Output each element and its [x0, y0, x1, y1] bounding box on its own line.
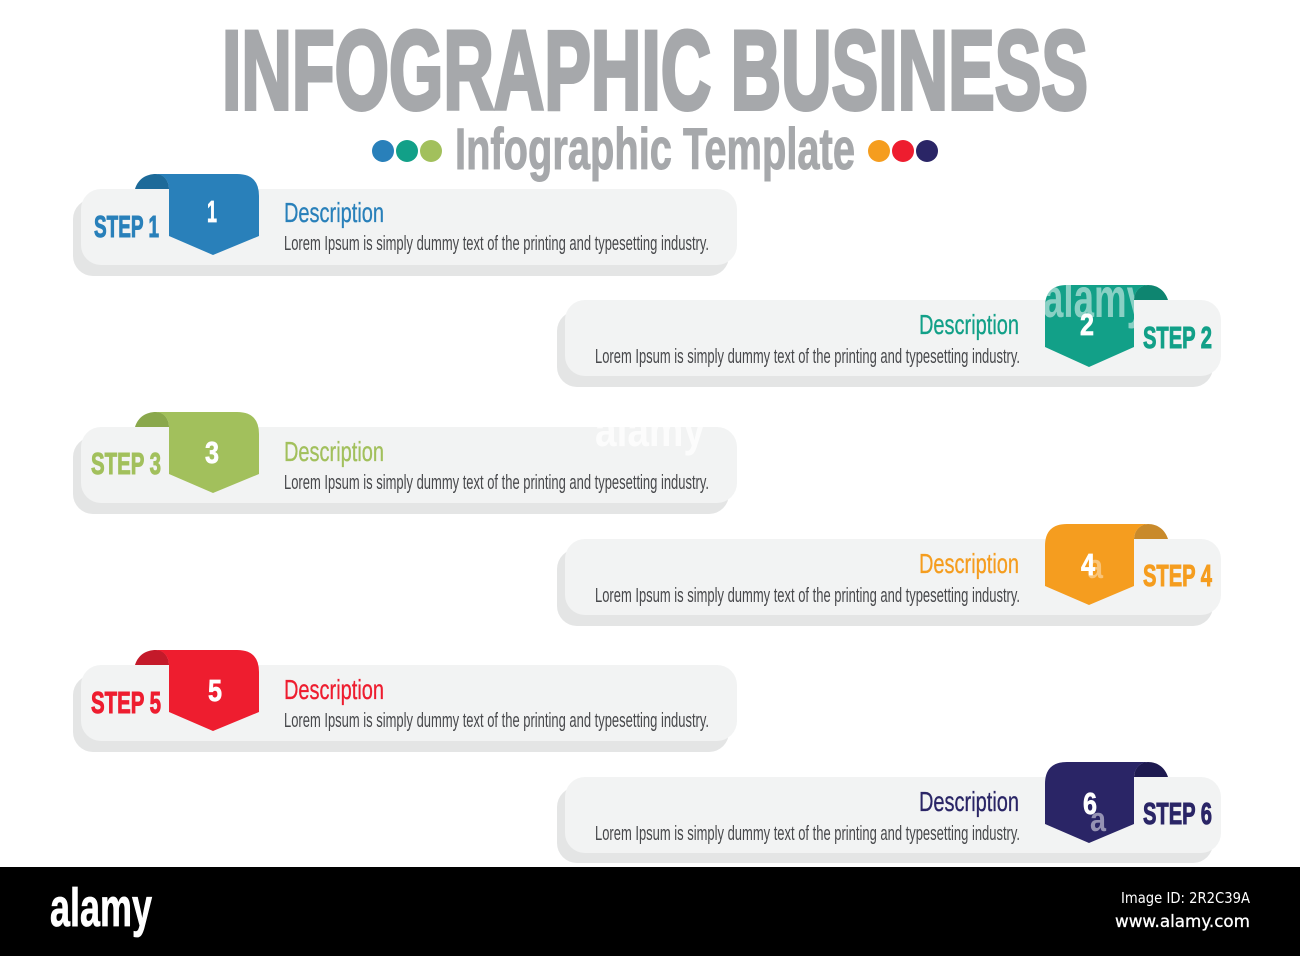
panel: step 5	[73, 650, 737, 752]
number 1: 1	[207, 194, 217, 229]
description heading 4: Description	[919, 548, 1019, 579]
watermark on ribbon 4: a	[1087, 548, 1104, 586]
step label 6: STEP 6	[1143, 796, 1212, 831]
ribbon 3	[135, 412, 169, 427]
ribbon 1	[135, 174, 169, 189]
subtitle: Infographic Template	[455, 117, 855, 182]
panel: step 1	[73, 174, 737, 276]
body text 3: Lorem Ipsum is simply dummy text of the printing and typesetting industry.	[284, 472, 709, 494]
panel: step 2	[557, 285, 1221, 387]
subtitle row	[372, 117, 938, 182]
watermark on ribbon 6: a	[1090, 801, 1107, 839]
body text 6: Lorem Ipsum is simply dummy text of the printing and typesetting industry.	[595, 823, 1020, 845]
number 4: 4	[1081, 547, 1096, 582]
image id: Image ID: 2R2C39A	[1121, 889, 1251, 907]
footer bar	[0, 867, 1300, 956]
footer logo: alamy	[50, 878, 152, 938]
panel: step 6	[557, 762, 1221, 863]
step label 4: STEP 4	[1143, 558, 1212, 593]
body text 5: Lorem Ipsum is simply dummy text of the printing and typesetting industry.	[284, 710, 709, 732]
watermark on ribbon 2: alamy	[1043, 266, 1147, 329]
step label 1: STEP 1	[94, 209, 159, 244]
number 2: 2	[1080, 307, 1094, 342]
body text 1: Lorem Ipsum is simply dummy text of the printing and typesetting industry.	[284, 233, 709, 255]
panel: step 3	[73, 404, 737, 514]
step label 2: STEP 2	[1143, 320, 1212, 355]
body text 2: Lorem Ipsum is simply dummy text of the printing and typesetting industry.	[595, 346, 1020, 368]
step label 5: STEP 5	[91, 685, 161, 720]
ribbon 2	[1134, 285, 1168, 300]
number 3: 3	[205, 435, 219, 470]
step label 3: STEP 3	[91, 446, 161, 481]
panel: step 4	[557, 524, 1221, 626]
watermark on card 3: alamy	[595, 404, 705, 456]
left dots	[372, 140, 442, 162]
ribbon 5	[135, 650, 169, 665]
number 5: 5	[208, 673, 222, 708]
description heading 2: Description	[919, 309, 1019, 340]
ribbon 4	[1134, 524, 1168, 539]
body text 4: Lorem Ipsum is simply dummy text of the printing and typesetting industry.	[595, 585, 1020, 607]
number 6: 6	[1083, 786, 1097, 821]
website: www.alamy.com	[1115, 912, 1250, 932]
description heading 5: Description	[284, 674, 384, 705]
right dots	[868, 140, 938, 162]
description heading 3: Description	[284, 436, 384, 467]
ribbon 6	[1134, 762, 1168, 777]
description heading 1: Description	[284, 197, 384, 228]
description heading 6: Description	[919, 786, 1019, 817]
